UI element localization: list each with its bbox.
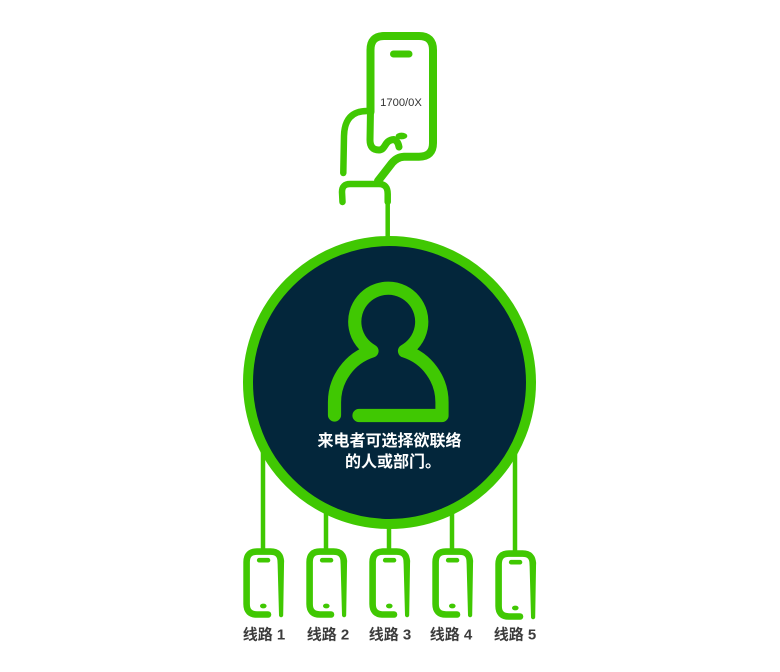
label: line 1: 线路 1 (243, 626, 285, 644)
label: line 2: 线路 2 (307, 626, 349, 644)
circle caption (317, 431, 462, 471)
main circle (248, 241, 531, 524)
icon: phone 4 (436, 552, 473, 617)
caption line 2: 的人或部门。 (345, 452, 441, 471)
icon: phone 2 (310, 552, 347, 617)
icon: cuff (342, 184, 388, 202)
icon: thumb (396, 133, 407, 139)
icon: hand back (343, 111, 367, 173)
line 1 (243, 552, 285, 644)
label: line 4: 线路 4 (430, 626, 473, 644)
icon: hand holding phone (342, 36, 433, 202)
icon: phone speaker (394, 50, 409, 58)
icon: caller phone body (370, 36, 433, 181)
phone number: 1700/0X (380, 97, 422, 109)
icon: person (334, 288, 442, 416)
line 4 (430, 552, 473, 644)
icon: phone 3 (373, 552, 410, 617)
icon: phone 5 (499, 554, 536, 619)
label: line 5: 线路 5 (494, 626, 536, 644)
icon: phone 1 (247, 552, 284, 617)
line 5 (494, 554, 536, 644)
connector lines (263, 190, 515, 552)
line 2 (307, 552, 349, 644)
icon: phone lower edge and finger (370, 110, 399, 150)
label: line 3: 线路 3 (369, 626, 411, 644)
line 3 (369, 552, 411, 644)
caption line 1: 来电者可选择欲联络 (317, 431, 462, 450)
